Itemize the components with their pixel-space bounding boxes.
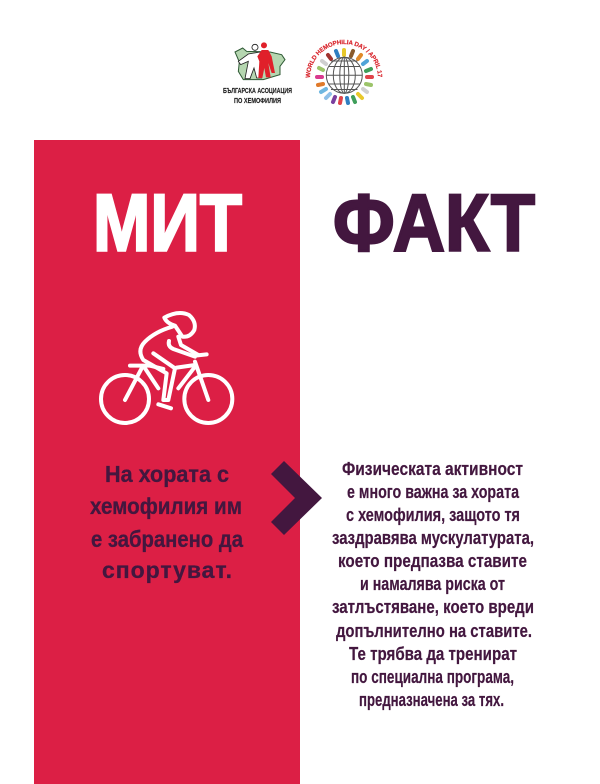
myth line 4: спортуват. <box>102 557 232 583</box>
myth line 2: хемофилия им <box>90 493 242 519</box>
fact line 11: предназначена за тях. <box>359 690 504 710</box>
fact line 1: Физическата активност <box>342 459 523 479</box>
heading: myth: МИТ <box>93 178 242 268</box>
logo text line 2: ПО ХЕМОФИЛИЯ <box>234 96 281 105</box>
ring of people <box>317 50 372 103</box>
logo text line 1: БЪЛГАРСКА АСОЦИАЦИЯ <box>223 86 292 95</box>
fact line 2: е много важна за хората <box>347 482 520 502</box>
myth text <box>90 461 243 583</box>
arc path for slogan <box>310 44 378 78</box>
map of Bulgaria <box>235 48 285 80</box>
icon: cyclist <box>101 313 232 423</box>
fact line 4: заздравява мускулатурата, <box>332 528 534 548</box>
arc slogan: WORLD HEMOPHILIA DAY / APRIL 17 <box>306 40 382 78</box>
panel: myth <box>34 140 300 784</box>
heading: fact: ФАКТ <box>333 178 535 268</box>
fact text <box>332 459 534 710</box>
arrow: chevron <box>271 461 322 535</box>
globe <box>326 57 362 93</box>
figure: white person <box>238 44 263 79</box>
fact line 10: по специална програма, <box>351 667 514 687</box>
fact line 7: затлъстяване, което вреди <box>332 597 534 617</box>
fact line 5: което предпазва ставите <box>338 551 527 571</box>
fact line 9: Те трябва да тренират <box>349 644 517 664</box>
fact line 8: допълнително на ставите. <box>336 621 532 641</box>
fact line 6: и намалява риска от <box>360 574 505 594</box>
figure: red person <box>257 42 275 78</box>
fact line 3: с хемофилия, защото тя <box>346 505 520 525</box>
myth line 1: На хората с <box>105 461 229 487</box>
emblem <box>235 42 285 80</box>
logo: Bulgarian hemophilia association <box>223 42 292 105</box>
myth line 3: е забранено да <box>91 526 243 552</box>
logo: World Hemophilia Day <box>306 40 382 105</box>
